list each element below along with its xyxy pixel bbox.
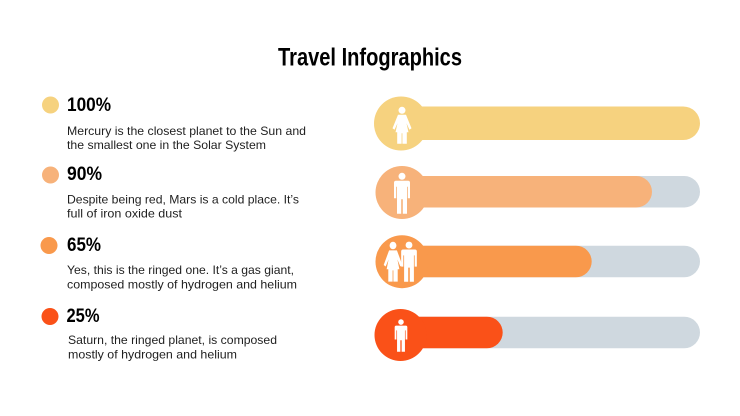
icon circle (376, 235, 428, 288)
icon: couple (384, 242, 417, 282)
track (400, 176, 700, 208)
title: Travel Infographics (278, 44, 462, 72)
description: ringed one (67, 263, 297, 292)
value: 90%: 90% (67, 163, 102, 185)
item: 90% (42, 163, 299, 220)
description: Saturn: mostly of hydrogen and helium (68, 348, 237, 362)
value: 25%: 25% (66, 305, 100, 327)
icon circle (374, 96, 428, 150)
icon: person (395, 319, 407, 352)
fill bar (400, 317, 503, 348)
description: Mars: Despite being red, Mars is a cold place. It’s (67, 192, 299, 206)
bar: 90% (376, 166, 700, 219)
icon: woman (392, 107, 412, 144)
value: 65%: 65% (67, 234, 101, 256)
value: 100%: 100% (67, 94, 111, 116)
track (400, 317, 700, 348)
description: Saturn: Saturn, the ringed planet, is composed (68, 333, 277, 347)
bar: 65% (376, 235, 700, 288)
fill bar (400, 176, 652, 208)
track (400, 246, 700, 277)
fill bar (400, 106, 700, 140)
icon: man (394, 173, 410, 214)
description: Saturn (68, 333, 277, 362)
icon circle (376, 166, 428, 219)
dot: 25% (42, 308, 58, 325)
dot: 90% (42, 166, 59, 184)
description: Mars (67, 192, 299, 220)
dot: 65% (40, 237, 58, 254)
item: 100% (42, 94, 306, 152)
bar: 25% (374, 309, 700, 361)
description: ringed one: composed mostly of hydrogen and helium (67, 278, 297, 292)
icon circle (374, 309, 426, 361)
bar: 100% (374, 96, 700, 150)
item: 65% (40, 234, 297, 292)
fill bar (400, 246, 592, 277)
description: ringed one: Yes, this is the ringed one. It’s a gas giant, (67, 263, 294, 277)
description: Mercury: the smallest one in the Solar System (67, 138, 266, 152)
description: Mars: full of iron oxide dust (67, 206, 183, 220)
item: 25% (42, 305, 277, 362)
description: Mercury (67, 124, 306, 152)
description: Mercury: Mercury is the closest planet to the Sun and (67, 124, 306, 138)
dot: 100% (42, 96, 59, 114)
